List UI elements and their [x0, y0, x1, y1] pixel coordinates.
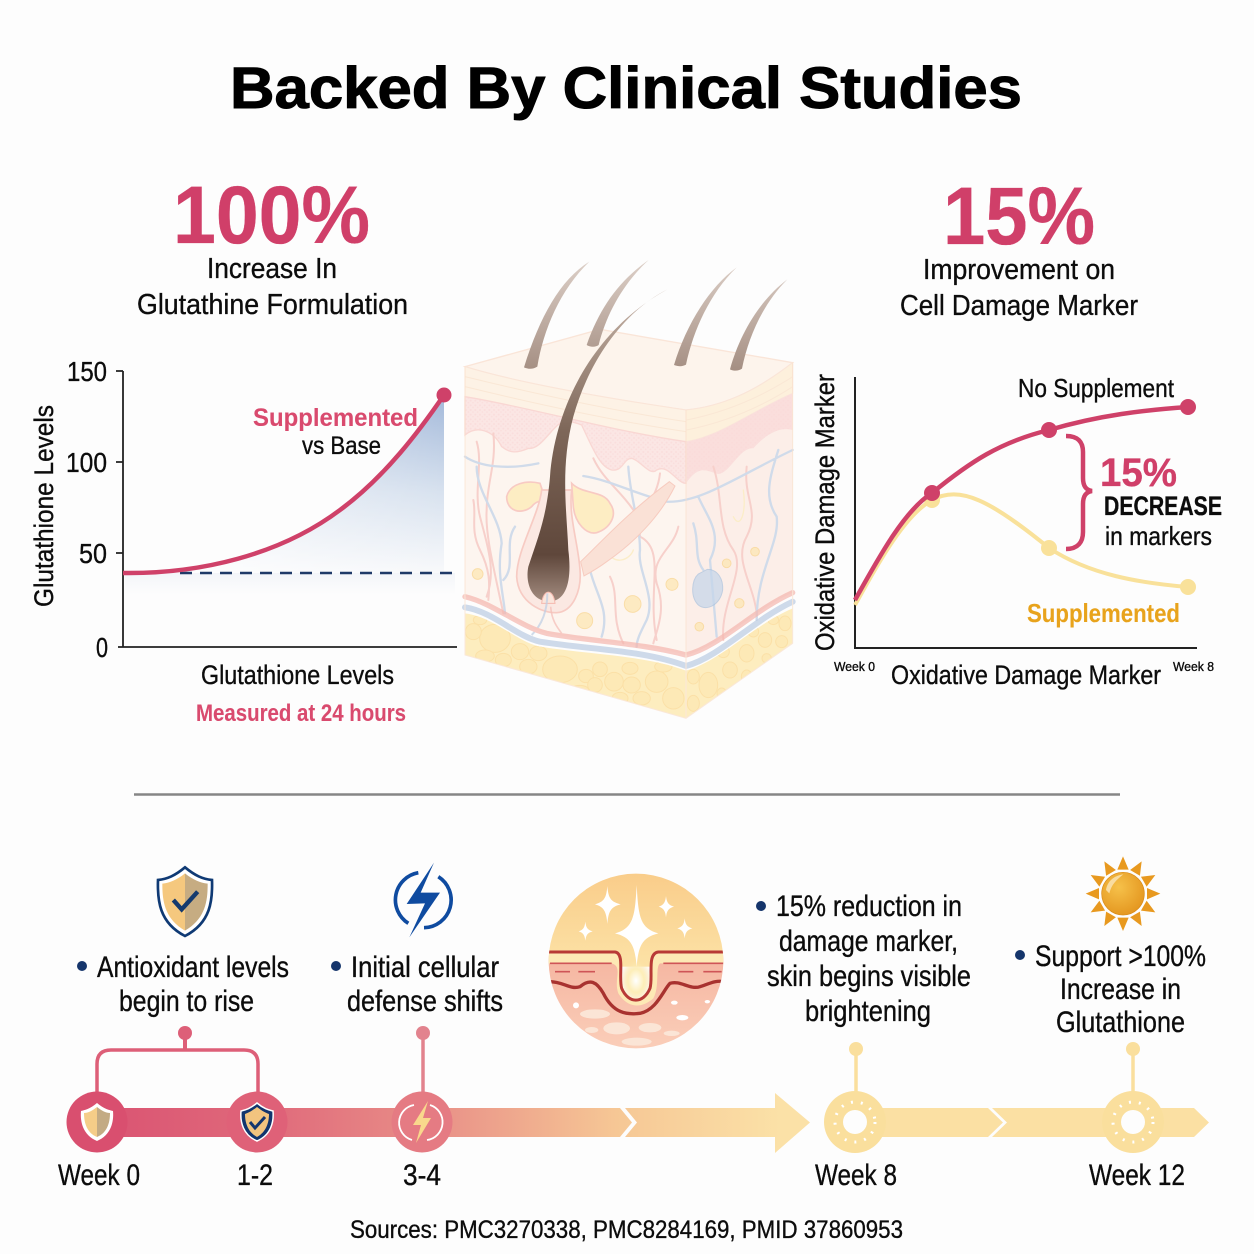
x axis label: Glutathione Levels [201, 660, 394, 690]
sparkles [579, 885, 692, 967]
timeline [58, 1026, 1209, 1192]
curve: supplemented [855, 492, 1196, 605]
callout: 15% decrease: DECREASE [1104, 491, 1222, 521]
chart: glutathione levels [29, 356, 457, 727]
skin base layers [465, 329, 793, 655]
skin top face [465, 329, 793, 410]
bracket [1066, 436, 1092, 549]
note: 15% reduction [756, 890, 971, 1028]
stat caption: Improvement on [923, 254, 1115, 286]
curve label: Supplemented [253, 404, 418, 432]
note: antioxidant levels: Antioxidant levels [97, 951, 289, 984]
note: cellular defense: defense shifts [347, 985, 503, 1018]
node: week 12 [1102, 1091, 1164, 1153]
callout: 15% decrease: 15% [1100, 451, 1177, 495]
x axis labels: Week 0 [834, 659, 875, 674]
x axis labels: Oxidative Damage Marker [891, 660, 1161, 690]
note: cellular defense: Initial cellular [351, 951, 499, 984]
note: support glutathione: Glutathione [1056, 1006, 1185, 1039]
panel: glutathione stat [137, 170, 408, 321]
dermis [465, 397, 686, 655]
lymph node [693, 569, 723, 608]
y axis ticks: 150 [67, 356, 107, 387]
arrector muscle [581, 482, 675, 576]
x axis label [196, 660, 406, 727]
sources: Sources: PMC3270338, PMC8284169, PMID 37860953 [350, 1216, 903, 1244]
curve: no supplement [855, 399, 1196, 600]
panel: timeline notes [77, 856, 1206, 1057]
note: support glutathione: Support >100% [1035, 940, 1206, 973]
stratum layer [465, 367, 686, 442]
y axis ticks: 50 [79, 538, 107, 569]
stat caption [900, 254, 1138, 322]
chart: oxidative damage marker [810, 373, 1222, 690]
x axis labels: Week 8 [1173, 659, 1214, 674]
skin lower layers [460, 363, 797, 723]
arrow: segment week 8 [855, 1108, 1003, 1137]
node: week 0 [66, 1092, 128, 1152]
callout: 15% decrease [1100, 451, 1222, 551]
curve label: vs Base [302, 432, 381, 460]
icon: shield with check [158, 867, 212, 936]
x axis label: Measured at 24 hours [196, 700, 406, 727]
note: 15% reduction: damage marker, [779, 925, 958, 958]
papilla [542, 592, 555, 603]
icon: sun [1086, 856, 1160, 931]
node: week 8 [824, 1091, 886, 1153]
week labels: Week 0 [58, 1159, 140, 1192]
note: support glutathione [1015, 940, 1206, 1039]
week labels: 1-2 [237, 1159, 273, 1192]
surface hairs [524, 260, 787, 371]
note: antioxidant levels: begin to rise [119, 985, 254, 1018]
stat caption: Glutathine Formulation [137, 289, 408, 321]
stat: 100%: 100% [173, 170, 370, 261]
curve: supplemented [123, 388, 452, 573]
arrow: gold head [625, 1093, 810, 1153]
y axis label: Oxidative Damage Marker [810, 374, 840, 651]
illustration: brightening skin disc [548, 874, 724, 1048]
label: no supplement: No Supplement [1018, 373, 1175, 403]
note: antioxidant levels [77, 951, 289, 1018]
fat layer [466, 608, 792, 718]
icon: lightning bolt [395, 863, 451, 937]
week labels: Week 8 [815, 1159, 897, 1192]
note: 15% reduction: skin begins visible [767, 960, 971, 993]
block outline [465, 363, 793, 718]
follicle sheath [517, 490, 580, 613]
note: 15% reduction: brightening [805, 995, 931, 1028]
title: Backed By Clinical Studies [230, 56, 1022, 121]
week labels: 3-4 [403, 1159, 441, 1192]
small cells [472, 547, 759, 631]
stat caption [137, 253, 408, 321]
vessels [465, 433, 793, 647]
sebaceous glands [507, 482, 613, 533]
illustration: skin cross-section [460, 260, 797, 723]
arrow: segment week 12 [992, 1108, 1209, 1137]
callout: 15% decrease: in markers [1105, 521, 1212, 551]
panel: cell damage stat [900, 171, 1138, 322]
stat: 15%: 15% [943, 171, 1095, 262]
epidermis [465, 397, 686, 483]
connector: week 3-4 pin [416, 1026, 430, 1095]
connector: week 8 pin [849, 1042, 863, 1095]
label: supplemented: Supplemented [1027, 598, 1180, 628]
connector: week 0 to 1-2 bracket [97, 1026, 258, 1095]
connector: week 12 pin [1126, 1042, 1140, 1095]
node: week 3-4 [392, 1092, 452, 1152]
hair shaft in follicle [528, 289, 667, 602]
note: 15% reduction: 15% reduction in [776, 890, 962, 923]
week labels [58, 1159, 1185, 1192]
stat caption: Increase In [207, 253, 337, 285]
arrow bar: gradient [97, 1108, 632, 1137]
note: support glutathione: Increase in [1060, 973, 1181, 1006]
note: cellular defense [331, 951, 503, 1018]
node: week 1-2 [226, 1092, 288, 1152]
y axis ticks [66, 356, 108, 663]
y axis label: Glutathione Levels [29, 405, 59, 607]
curve label [253, 404, 418, 460]
y axis ticks: 100 [66, 447, 107, 478]
arteries and veins bands [465, 593, 793, 666]
stat caption: Cell Damage Marker [900, 290, 1138, 322]
y axis ticks: 0 [96, 632, 108, 663]
week labels: Week 12 [1089, 1159, 1185, 1192]
